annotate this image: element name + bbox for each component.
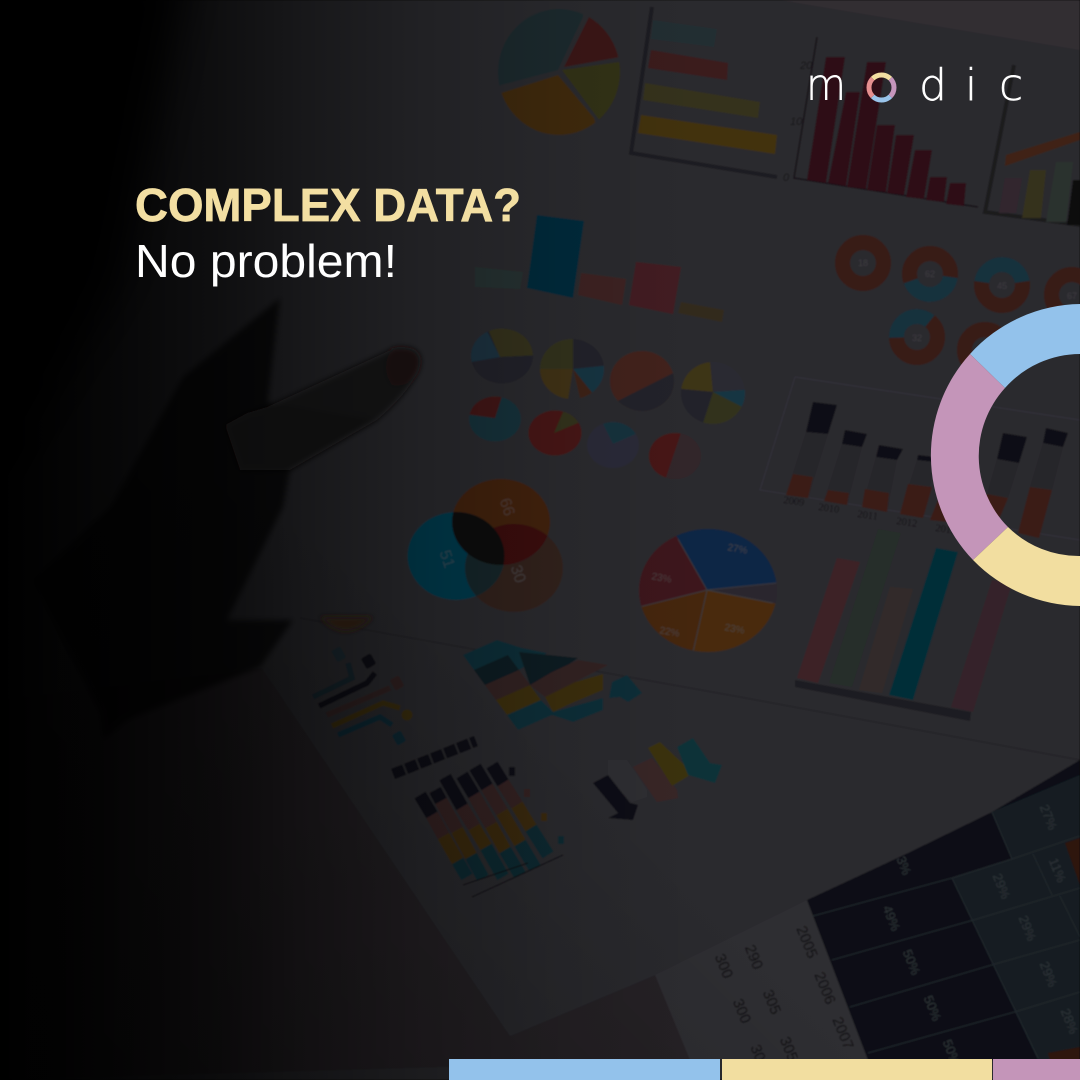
donut row bbox=[842, 242, 1080, 370]
pie chart: percentages: 23% bbox=[724, 622, 745, 637]
bar chart: middle columns bbox=[475, 215, 724, 322]
dark data table: 27% bbox=[1037, 802, 1061, 832]
dark data table: 29% bbox=[990, 871, 1014, 901]
bar chart: dark red columns: 0 bbox=[783, 172, 790, 184]
pie chart: percentages bbox=[639, 528, 776, 652]
logo wordmark: i bbox=[965, 60, 977, 111]
venn diagram: 51 bbox=[436, 548, 457, 570]
table header numbers: 2005 bbox=[792, 924, 821, 961]
heading: no problem: No problem! bbox=[135, 235, 397, 287]
logo: modic bbox=[806, 60, 1023, 111]
heading bbox=[135, 179, 521, 287]
stacked column chart with years bbox=[760, 377, 1080, 540]
venn diagram: 30 bbox=[507, 563, 528, 585]
table header numbers: 2007 bbox=[828, 1015, 857, 1052]
infographic sheet: folded ribbon blocks bbox=[463, 640, 642, 730]
donut values: 67 bbox=[1067, 291, 1077, 301]
table header numbers bbox=[711, 924, 857, 1064]
dark data table: 50% bbox=[940, 1037, 964, 1067]
small pie charts bbox=[470, 329, 746, 478]
donut values: 18 bbox=[858, 258, 868, 268]
logo wordmark: c bbox=[999, 60, 1023, 111]
donut values: 32 bbox=[912, 333, 922, 343]
infographic sheet: arrow row bbox=[593, 738, 722, 820]
table header numbers: 305 bbox=[759, 987, 784, 1017]
dark data table: 29% bbox=[1037, 959, 1061, 989]
hand silhouette bbox=[33, 298, 421, 740]
stacked column chart with years: 2010 bbox=[818, 502, 840, 516]
bottom colour bar bbox=[449, 1059, 1080, 1080]
table header numbers: 305 bbox=[776, 1034, 801, 1064]
logo wordmark: d bbox=[919, 60, 947, 111]
venn diagram: 66 bbox=[496, 496, 517, 518]
bar chart: dark red columns: 20 bbox=[799, 60, 813, 72]
dark data table: 50% bbox=[900, 947, 924, 977]
dark data table: 11% bbox=[1046, 856, 1069, 885]
donut values: 62 bbox=[925, 269, 935, 279]
infographic sheet: bent arrows bbox=[313, 646, 412, 746]
donut graphic: right edge bbox=[931, 304, 1080, 606]
table header numbers: 30 bbox=[747, 1042, 769, 1064]
table header numbers: 300 bbox=[729, 996, 754, 1026]
chart: right columns and line bbox=[985, 65, 1080, 225]
bar chart: tall slanted bars bbox=[795, 529, 1012, 721]
pie chart: top bbox=[498, 10, 620, 135]
stacked column chart with years: 2009 bbox=[783, 495, 805, 509]
stacked column chart with years: 2012 bbox=[896, 516, 918, 530]
dark data table: 50% bbox=[921, 993, 945, 1023]
logo ring bbox=[869, 75, 894, 100]
heading: complex data: COMPLEX DATA? bbox=[135, 179, 521, 231]
table header numbers: 290 bbox=[741, 942, 766, 972]
donut values: 45 bbox=[997, 281, 1007, 291]
table header numbers: 300 bbox=[711, 951, 736, 981]
dark data table bbox=[807, 760, 1080, 1067]
pie chart: percentages: 27% bbox=[727, 542, 748, 557]
donut values bbox=[858, 258, 1077, 343]
pie chart: percentages: 23% bbox=[651, 571, 672, 586]
stacked bar chart on lower sheet bbox=[393, 741, 564, 897]
dark data table: 49% bbox=[880, 903, 904, 933]
stacked column chart with years: 2011 bbox=[857, 509, 879, 523]
dark data table: 53% bbox=[891, 847, 915, 877]
logo wordmark: m bbox=[806, 60, 846, 111]
venn diagram bbox=[408, 479, 563, 612]
table header numbers: 2006 bbox=[810, 970, 839, 1007]
dark data table: 29% bbox=[1016, 913, 1040, 943]
bar chart: horizontal bars bbox=[631, 7, 777, 177]
pie chart: percentages: 22% bbox=[659, 625, 680, 640]
bar chart: dark red columns bbox=[783, 37, 978, 207]
stacked column chart with years: 2013 bbox=[935, 523, 957, 537]
bar chart: dark red columns: 10 bbox=[790, 116, 803, 128]
logo wordmark: o bbox=[867, 60, 894, 111]
